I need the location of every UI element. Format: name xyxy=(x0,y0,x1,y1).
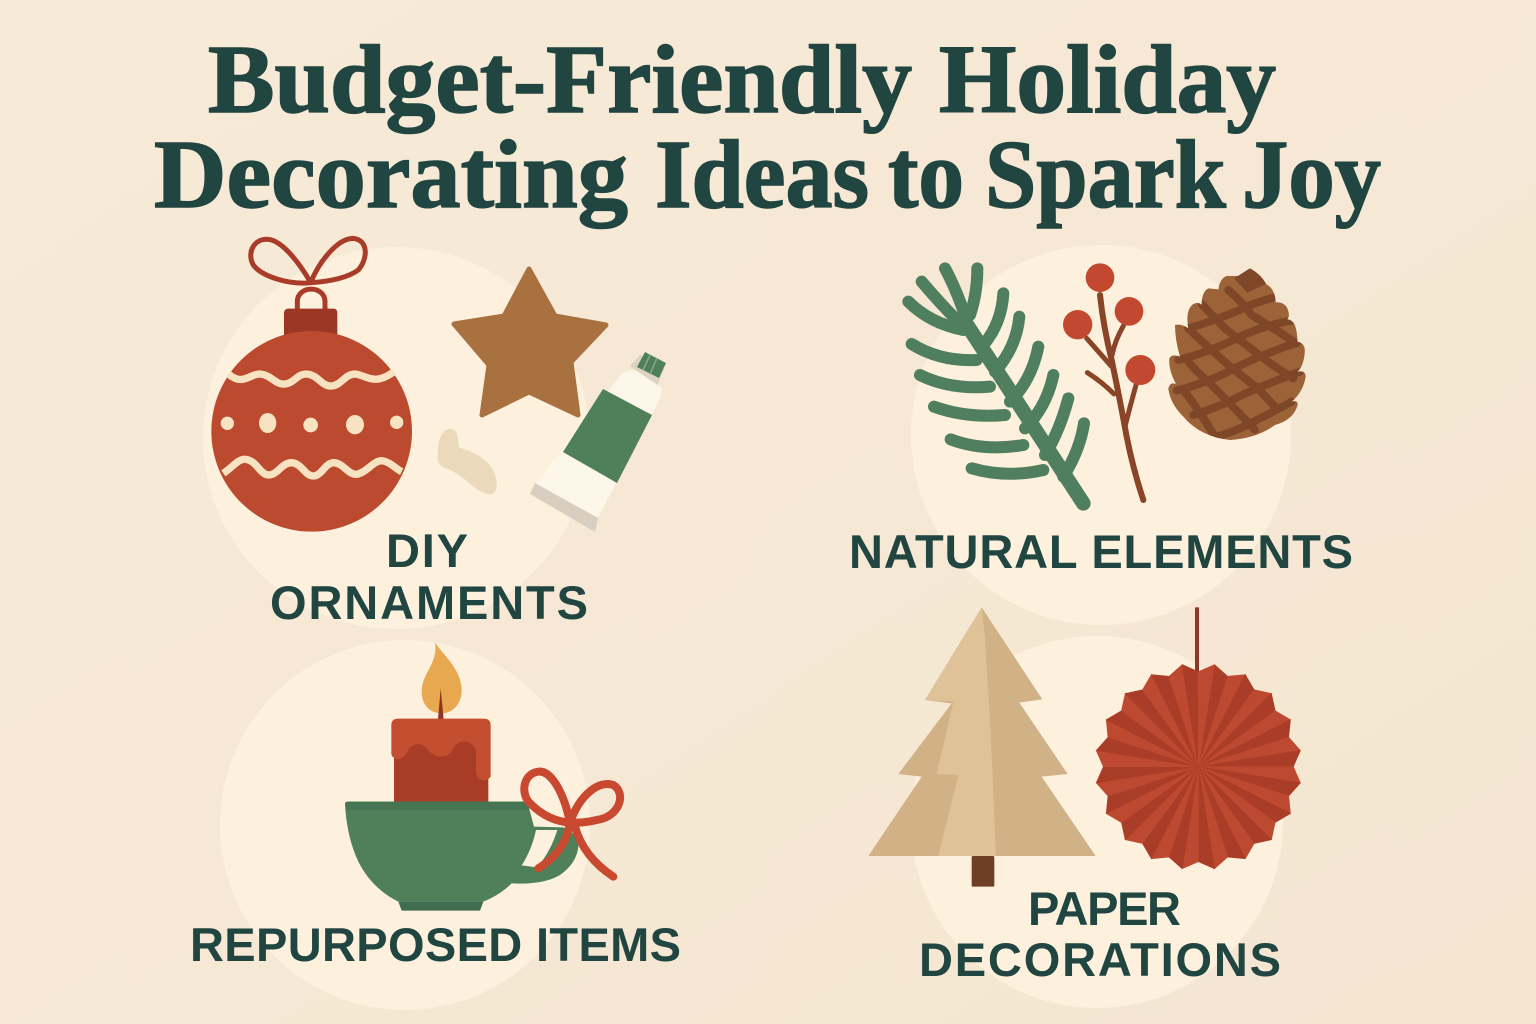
icon: pine branch xyxy=(908,268,1084,503)
icon: red ornament xyxy=(211,238,412,532)
title xyxy=(154,26,1381,229)
label: DIY Ornaments xyxy=(270,524,588,629)
panel: DIY ornaments xyxy=(203,238,666,629)
title: to xyxy=(888,121,964,229)
title: Budget-Friendly xyxy=(208,26,912,134)
icon: paper rosette xyxy=(1091,607,1305,874)
icon: glue smear xyxy=(438,429,497,494)
background circle: repurposed xyxy=(220,640,590,1010)
panel: repurposed items xyxy=(190,640,681,1010)
icon: red berries xyxy=(1063,263,1155,500)
icon: pinecone xyxy=(1168,268,1306,440)
icon: paint tube xyxy=(530,352,666,532)
label: Paper Decorations xyxy=(919,882,1281,986)
background circle: natural xyxy=(911,245,1291,625)
icon: ribbon bow xyxy=(524,772,620,877)
background circle: DIY xyxy=(203,247,589,629)
label: Repurposed Items: REPURPOSED ITEMS xyxy=(190,918,681,971)
background circle: paper xyxy=(911,636,1283,1008)
title: Ideas xyxy=(655,121,869,229)
icon: wick xyxy=(438,688,444,719)
label: Natural Elements: NATURAL ELEMENTS xyxy=(849,525,1353,578)
title: Joy xyxy=(1242,121,1381,229)
icon: flame xyxy=(422,643,462,713)
icon: gingerbread star xyxy=(454,269,606,415)
icon: teacup xyxy=(345,802,578,902)
title: Holiday xyxy=(939,26,1276,134)
icon: candle in teacup xyxy=(345,643,620,911)
title: Spark xyxy=(985,121,1226,229)
icon: candle body xyxy=(394,730,488,803)
panel: natural elements xyxy=(849,245,1353,625)
icon: melted wax xyxy=(391,719,491,781)
icon: paper tree xyxy=(868,607,1096,887)
label: DIY Ornaments: ORNAMENTS xyxy=(270,576,588,629)
panel: paper decorations xyxy=(868,607,1305,1008)
label: DIY Ornaments: DIY xyxy=(386,524,468,577)
label: Paper Decorations: PAPER xyxy=(1028,882,1181,935)
label: Paper Decorations: DECORATIONS xyxy=(919,933,1281,986)
title: Decorating xyxy=(154,121,628,229)
